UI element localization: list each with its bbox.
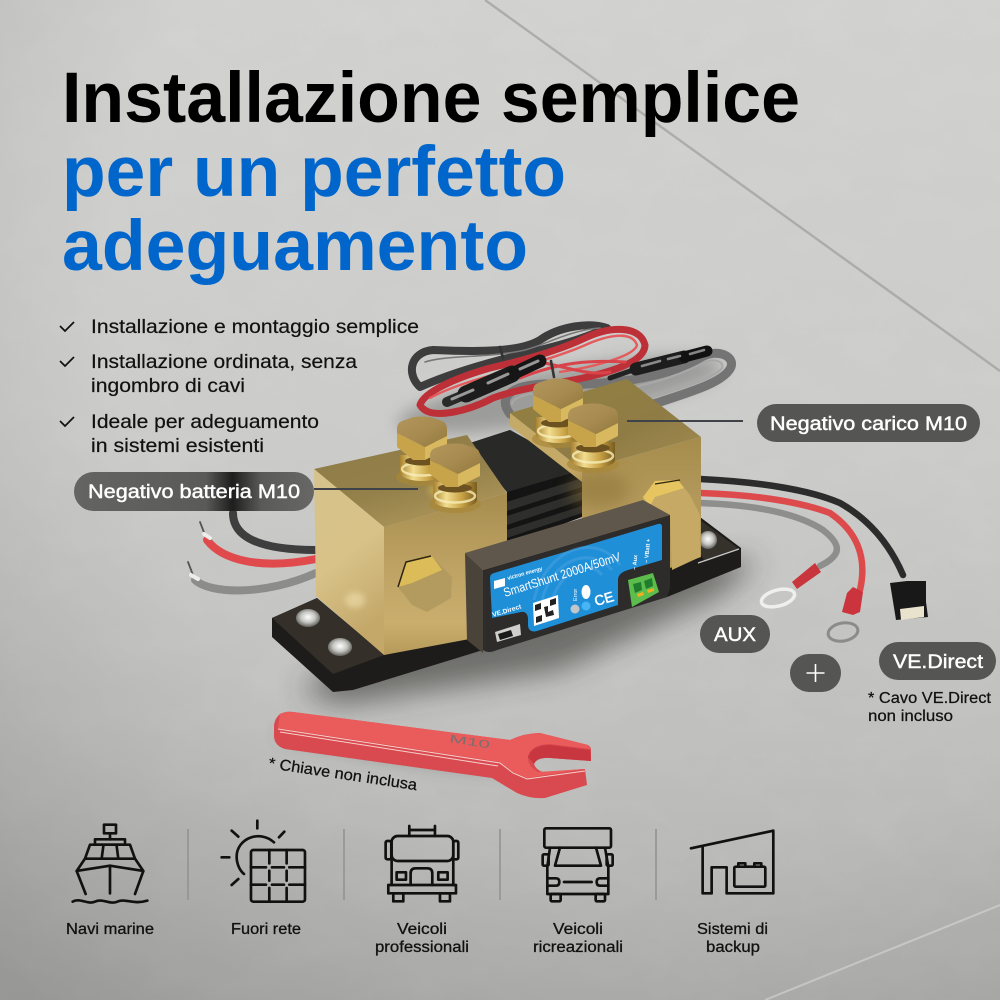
caption: Navi marine: Navi marine bbox=[66, 921, 154, 938]
caption: Veicoli professionali: Veicoli bbox=[397, 921, 447, 938]
icon: ship bbox=[73, 825, 147, 903]
dividers bbox=[188, 829, 656, 900]
label: Negativo batteria M10: Negativo batteria M10 bbox=[88, 481, 300, 503]
label: plus bbox=[790, 654, 841, 692]
terminal labels: – VBatt + bbox=[644, 538, 652, 563]
feature 2: ingombro di cavi bbox=[91, 375, 245, 397]
caption: Sistemi di backup: Sistemi di bbox=[697, 921, 768, 938]
note: wrench not included: * Chiave non inclusa bbox=[267, 755, 419, 794]
green connector bbox=[628, 573, 659, 607]
feature 1: Installazione e montaggio semplice bbox=[91, 316, 419, 338]
caption: Fuori rete: Fuori rete bbox=[231, 921, 301, 938]
side bolt right bbox=[643, 480, 700, 570]
wrench size mark: M10 bbox=[449, 733, 491, 751]
label: Negativo carico M10 bbox=[627, 404, 980, 442]
caption: Veicoli ricreazionali bbox=[533, 921, 623, 956]
title bbox=[62, 59, 800, 286]
feature 3 bbox=[91, 411, 319, 457]
right wires bbox=[700, 479, 903, 590]
icon: backup garage with battery bbox=[691, 831, 773, 893]
left wires bbox=[188, 513, 316, 590]
title: Installazione semplice bbox=[62, 59, 800, 138]
terminal labels: – Aux bbox=[632, 554, 639, 570]
feature list bbox=[60, 316, 419, 457]
fuse holder right bbox=[610, 350, 707, 378]
ring terminal plus bbox=[827, 587, 863, 643]
SmartShunt housing bbox=[465, 500, 670, 653]
icon: recreational vehicle bbox=[543, 828, 613, 901]
title: adeguamento bbox=[62, 207, 528, 286]
terminal labels bbox=[632, 538, 652, 570]
wrench bbox=[274, 712, 591, 798]
label: AUX: AUX bbox=[714, 624, 756, 646]
product: SmartShunt with cables bbox=[188, 325, 928, 705]
brass block left bbox=[314, 435, 507, 655]
caption: Veicoli ricreazionali: Veicoli bbox=[553, 921, 603, 938]
brass block right bbox=[510, 379, 701, 590]
error LED bbox=[570, 589, 580, 614]
check icon 2 bbox=[60, 357, 74, 366]
note: VE.Direct cable not included bbox=[868, 690, 992, 725]
label: Negativo carico M10: Negativo carico M10 bbox=[770, 413, 967, 435]
side bolt left bbox=[398, 556, 452, 612]
VE.Direct connector bbox=[890, 581, 928, 620]
icon: off-grid solar bbox=[222, 821, 305, 902]
label: AUX bbox=[700, 615, 770, 653]
fuse holder left bbox=[447, 361, 540, 402]
base plate bbox=[272, 517, 741, 692]
icon: professional truck bbox=[386, 826, 458, 901]
feature 3: Ideale per adeguamento bbox=[91, 411, 319, 433]
caption: Sistemi di backup bbox=[697, 921, 768, 956]
caption: Veicoli professionali: professionali bbox=[375, 939, 469, 956]
caption: Veicoli professionali bbox=[375, 921, 469, 956]
caption: Veicoli ricreazionali: ricreazionali bbox=[533, 939, 623, 956]
feature 3: in sistemi esistenti bbox=[91, 435, 264, 457]
note: VE.Direct cable not included: non incluso bbox=[868, 708, 953, 725]
label: VE.Direct bbox=[879, 642, 996, 680]
model name: SmartShunt 2000A/50mV bbox=[502, 550, 623, 600]
swirl mark bbox=[534, 547, 620, 600]
label: VE.Direct: VE.Direct bbox=[893, 651, 984, 673]
bolts right block bbox=[532, 378, 619, 473]
blue label bbox=[490, 524, 662, 631]
QR code bbox=[533, 595, 559, 626]
brand bbox=[494, 566, 544, 589]
product shadow bbox=[300, 341, 760, 705]
VE.Direct port bbox=[495, 624, 521, 642]
feature 2 bbox=[91, 351, 357, 397]
ring terminal AUX bbox=[760, 563, 821, 610]
screws bbox=[296, 531, 717, 656]
note: VE.Direct cable not included: * Cavo VE.Direct bbox=[868, 690, 992, 707]
brand: victron energy bbox=[507, 566, 544, 582]
check icon 1 bbox=[60, 322, 74, 331]
check icon 3 bbox=[60, 417, 74, 426]
feature 2: Installazione ordinata, senza bbox=[91, 351, 357, 373]
title: per un perfetto bbox=[62, 133, 566, 212]
CE mark: CE bbox=[592, 588, 616, 609]
port label: VE.Direct bbox=[492, 603, 523, 619]
caption: Sistemi di backup: backup bbox=[706, 939, 760, 956]
error LED: Error bbox=[573, 589, 579, 601]
rear cables: dark, grey, red bbox=[412, 325, 732, 414]
shunt blade: black fins bbox=[467, 430, 582, 545]
bluetooth LED bbox=[582, 585, 590, 610]
label: Negativo batteria M10 bbox=[74, 472, 418, 511]
bolts left block bbox=[396, 416, 481, 513]
use cases row bbox=[66, 821, 773, 956]
